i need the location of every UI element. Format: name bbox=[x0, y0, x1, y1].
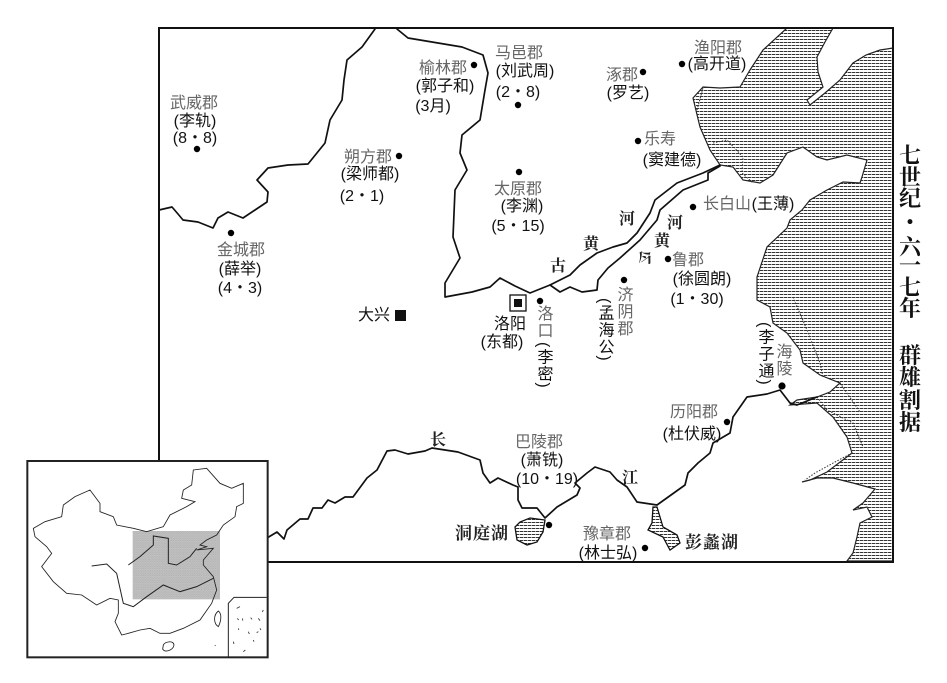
river: Yangtze bbox=[267, 390, 817, 539]
inset islands bbox=[163, 611, 221, 651]
label: Mayi: (刘武周) bbox=[496, 62, 554, 80]
label: Baling: (萧铣) bbox=[521, 451, 563, 469]
label: Baling: 巴陵郡 bbox=[515, 433, 563, 451]
river labels: Yangtze: 长 bbox=[430, 431, 446, 449]
label: Yuyang bbox=[679, 39, 746, 73]
label: Changbaishan: 长白山 bbox=[703, 195, 751, 213]
label: Taiyuan: (李渊) bbox=[501, 197, 543, 215]
inset China outline bbox=[33, 468, 243, 635]
river labels: Yellow River: 河 bbox=[619, 210, 635, 228]
label: Jincheng: (4・3) bbox=[218, 280, 262, 297]
label: Taiyuan: (5・15) bbox=[491, 218, 545, 235]
river labels: Yellow River: 今 bbox=[633, 246, 657, 271]
label: Shuofang bbox=[340, 148, 402, 205]
label: Yulin: (3月) bbox=[415, 98, 451, 115]
label: Luokou: (李密) bbox=[534, 342, 554, 389]
label: Luoyang: (东都) bbox=[481, 333, 523, 351]
label: Leshou bbox=[635, 130, 701, 169]
river: modern Yellow River bbox=[550, 166, 720, 292]
label: Wuwei: (李轨) bbox=[174, 112, 216, 130]
label: Luokou bbox=[534, 298, 554, 389]
inset: China locator map bbox=[27, 461, 268, 657]
inset highlight area bbox=[133, 531, 220, 599]
label: Yuzhang: (林士弘) bbox=[579, 544, 637, 562]
label: Yuzhang: 豫章郡 bbox=[583, 525, 631, 543]
label: Hailing: (李子通) bbox=[756, 322, 774, 386]
label: Changbaishan: (王薄) bbox=[752, 195, 794, 213]
label: Zhuo: 涿郡 bbox=[606, 66, 638, 84]
label: Leshou: (窦建德) bbox=[643, 151, 701, 169]
title: vertical: 纪 bbox=[899, 186, 921, 211]
title: vertical bbox=[899, 143, 923, 435]
label: Luokou: 洛口 bbox=[534, 305, 554, 339]
label: Liyang: (杜伏威) bbox=[663, 425, 721, 443]
label: Jincheng bbox=[217, 230, 265, 297]
label: Baling bbox=[515, 433, 578, 528]
label: Luoyang: 洛阳 bbox=[494, 315, 526, 333]
label: Yulin bbox=[415, 59, 477, 115]
label: Changbaishan bbox=[690, 195, 794, 213]
label: Lu: (1・30) bbox=[670, 291, 724, 308]
river labels: Yangtze: 江 bbox=[622, 469, 638, 487]
title: vertical: 割 bbox=[899, 388, 921, 413]
label: Baling: (10・19) bbox=[516, 471, 578, 488]
title: vertical: 雄 bbox=[899, 365, 921, 390]
label: Mayi bbox=[495, 44, 554, 108]
label: Yuyang: 渔阳郡 bbox=[694, 39, 742, 57]
inset islets bbox=[215, 607, 263, 652]
label: Wuwei: (8・8) bbox=[173, 130, 217, 147]
label: Lu bbox=[665, 251, 731, 308]
sea bbox=[693, 28, 893, 561]
river: Yellow River upper course bbox=[159, 29, 720, 297]
title: vertical: 年 bbox=[899, 296, 921, 321]
label: Yuyang: (高开道) bbox=[688, 55, 746, 73]
map frame bbox=[159, 28, 893, 562]
label: Pengli Lake: 彭蠡湖 bbox=[685, 532, 739, 552]
label: Yulin: 榆林郡 bbox=[419, 59, 467, 77]
label: Jincheng: 金城郡 bbox=[217, 241, 265, 259]
label: Jincheng: (薛举) bbox=[219, 260, 261, 278]
label: Mayi: (2・8) bbox=[496, 84, 540, 101]
label: Daxing bbox=[358, 306, 406, 324]
lake: Poyang bbox=[648, 507, 680, 550]
label: Dongting Lake: 洞庭湖 bbox=[455, 524, 509, 543]
label: Daxing: 大兴 bbox=[358, 306, 390, 324]
label: Taiyuan: 太原郡 bbox=[494, 180, 542, 198]
title: vertical: 据 bbox=[899, 410, 921, 435]
river labels: Yellow River: 黄 bbox=[583, 234, 601, 253]
label: Zhuo: (罗艺) bbox=[607, 84, 649, 102]
inset South China Sea box bbox=[228, 597, 267, 657]
label: Jiyin bbox=[596, 277, 634, 362]
label: Wuwei: 武威郡 bbox=[170, 94, 218, 112]
river labels: Yellow River: 河 bbox=[667, 214, 683, 232]
river labels: Yangtze bbox=[430, 431, 638, 487]
label: Yulin: (郭子和) bbox=[416, 77, 474, 95]
title: vertical: 六 bbox=[899, 235, 923, 260]
lake: Dongting bbox=[515, 518, 545, 545]
label: Shuofang: (2・1) bbox=[340, 188, 384, 205]
label: Hailing bbox=[756, 322, 792, 390]
title: vertical: 七 bbox=[899, 275, 921, 300]
river labels: Yellow River bbox=[550, 210, 683, 275]
label: Shuofang: (梁师都) bbox=[341, 165, 399, 183]
label: Jiyin: (孟海公) bbox=[596, 298, 614, 362]
river labels: Yellow River: 黄 bbox=[654, 231, 672, 250]
inset rivers bbox=[92, 536, 213, 607]
label: Yuzhang bbox=[579, 525, 648, 562]
label: Lu: 鲁郡 bbox=[672, 251, 704, 269]
label: Liyang: 历阳郡 bbox=[670, 403, 718, 421]
label: Jiyin: 济阴郡 bbox=[614, 286, 634, 337]
label: Wuwei bbox=[170, 94, 218, 152]
label: Mayi: 马邑郡 bbox=[495, 44, 543, 62]
river labels: Yellow River: 古 bbox=[550, 256, 566, 275]
title: vertical: 一 bbox=[899, 253, 921, 278]
title: vertical: 世 bbox=[899, 165, 921, 190]
label: Shuofang: 朔方郡 bbox=[344, 148, 392, 166]
label: Hailing: 海陵 bbox=[774, 343, 792, 377]
label: Lu: (徐圆朗) bbox=[673, 270, 731, 288]
title: vertical: ・ bbox=[899, 210, 921, 235]
title: vertical: 群 bbox=[899, 343, 921, 368]
label: Leshou: 乐寿 bbox=[644, 130, 676, 148]
label: Taiyuan bbox=[491, 169, 545, 235]
label: Liyang bbox=[663, 403, 730, 443]
label: Zhuo bbox=[606, 66, 649, 102]
label: Luoyang bbox=[481, 295, 526, 351]
title: vertical: 七 bbox=[899, 143, 921, 168]
